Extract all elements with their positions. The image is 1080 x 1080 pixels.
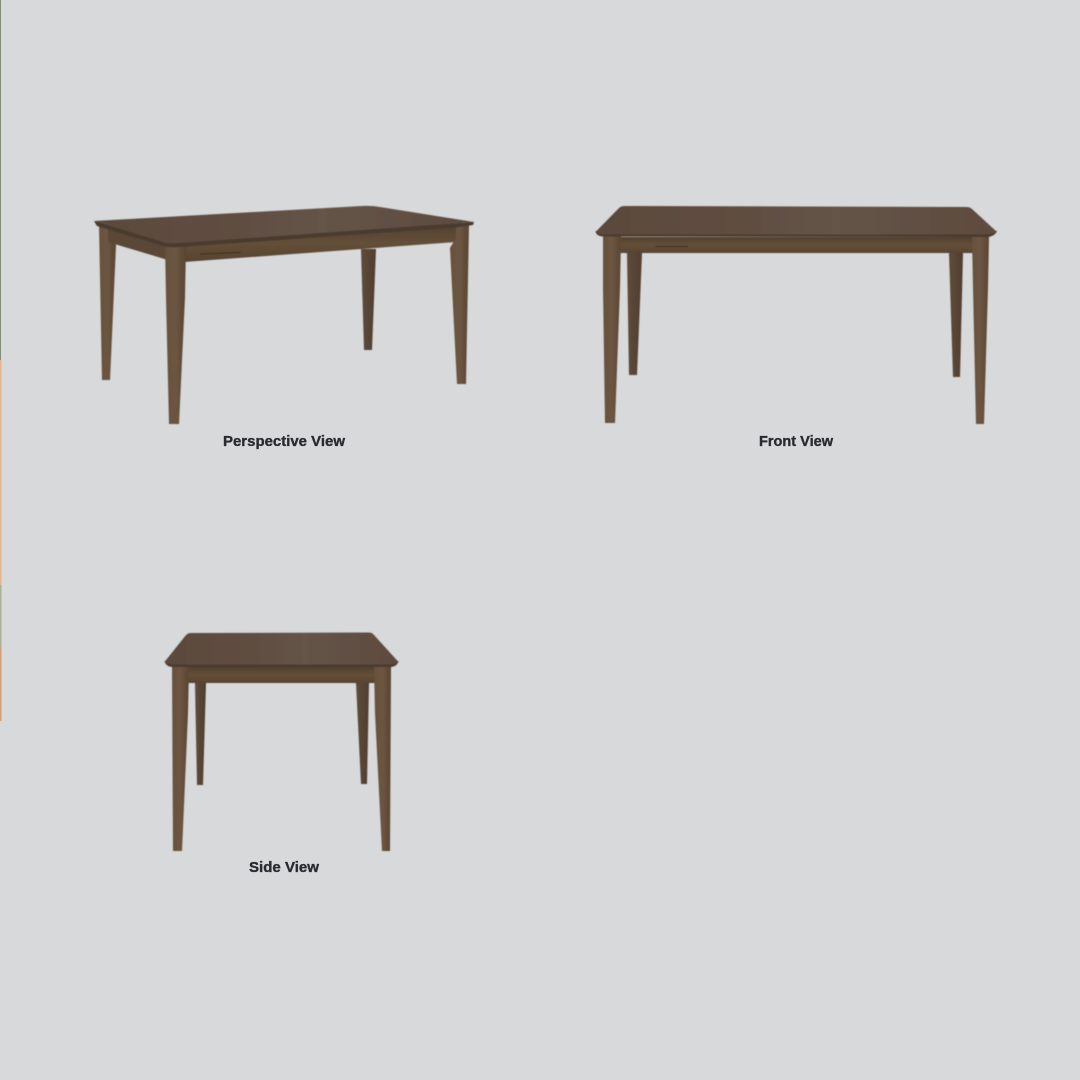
back left leg	[627, 253, 642, 375]
table top edge	[596, 231, 997, 237]
label: perspective view: Perspective View	[223, 434, 346, 450]
left apron	[108, 226, 168, 260]
table top edge	[94, 221, 474, 247]
back right leg	[356, 683, 369, 784]
far left leg	[99, 224, 116, 380]
front leg	[165, 243, 186, 424]
back right leg	[949, 253, 963, 377]
apron	[620, 237, 973, 253]
apron	[188, 667, 375, 683]
table top surface	[164, 632, 398, 664]
apron crack mark	[655, 246, 688, 248]
perspective view table	[94, 206, 474, 424]
back left leg	[195, 683, 206, 785]
right leg	[450, 224, 469, 384]
apron crack mark	[200, 252, 241, 254]
right leg	[972, 236, 989, 424]
left leg	[172, 666, 189, 851]
table top edge	[164, 661, 398, 667]
right leg	[374, 666, 391, 851]
table top surface	[596, 206, 997, 234]
front apron	[184, 224, 458, 262]
back right leg	[361, 249, 376, 350]
table top surface	[94, 206, 474, 243]
label: side view: Side View	[249, 860, 320, 876]
left edge colour strip	[0, 0, 2, 721]
label: front view: Front View	[759, 434, 834, 450]
side view table	[164, 632, 398, 851]
left leg	[603, 236, 621, 423]
front view table	[596, 206, 997, 424]
